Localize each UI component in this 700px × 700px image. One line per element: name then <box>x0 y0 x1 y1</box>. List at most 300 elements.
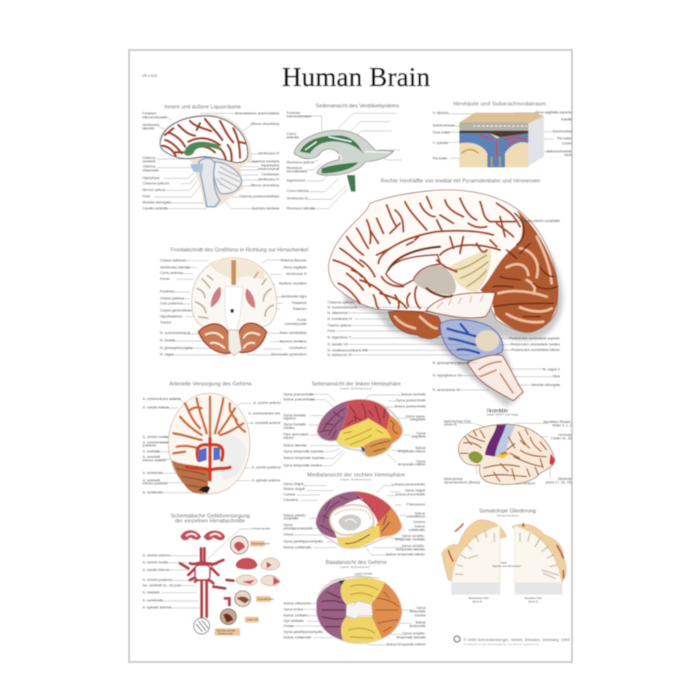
panel: ventricular system: Cornu <box>287 132 296 136</box>
panel: right hemisphere medial view: N. hypoglossus XII <box>433 374 462 378</box>
left labels: Foramen <box>287 111 301 115</box>
panel: frontal section: Fornix <box>297 318 307 322</box>
panel: meninges and subarachnoid space: raum <box>564 153 572 157</box>
right labels: Sinus sagittalis superior <box>535 110 573 114</box>
panel: schematic vessel supply: Lobus VIII <box>247 618 259 622</box>
cerebrum sulci <box>333 197 520 308</box>
yellow auditory <box>495 452 510 458</box>
red lobe <box>355 492 392 523</box>
brain section: halo <box>158 114 252 208</box>
central label: Lippe <box>500 560 507 564</box>
panel: meninges and subarachnoid space: Arachnoidea <box>552 130 572 134</box>
orange sulci <box>375 592 398 632</box>
panel: inner and outer CSF spaces: Pons <box>142 195 151 199</box>
panel: right hemisphere medial view small: temporalis lateralis <box>396 547 425 551</box>
cerebellum folia <box>217 167 240 190</box>
panel: frontal section: Thalamus <box>291 301 307 305</box>
label box <box>245 617 258 623</box>
cerebrum <box>160 116 248 163</box>
panel: right hemisphere medial view: N. trochlearis IV <box>327 317 353 321</box>
panel: arterial supply: A. spinalis anterior <box>252 478 281 482</box>
heading: Seitenansicht des Ventrikelsystems <box>316 103 399 109</box>
panel: left hemisphere lateral view: Gyrus postcentralis <box>396 399 426 403</box>
panel: cortical areas: Sehrinde <box>558 477 572 481</box>
panel: schematic vessel supply: Aa. cerebelli (S., sf) post. <box>143 583 182 587</box>
left labels: Corpus callosum <box>160 258 186 262</box>
panel: arterial supply: A. vertebralis <box>143 491 163 495</box>
panel: meninges and subarachnoid space: Cortex <box>562 141 572 145</box>
panel: left hemisphere lateral view: Sulcus temporalis superior <box>283 456 325 460</box>
left labels: Foramen <box>142 112 156 116</box>
right labels: A. cerebri anterior <box>253 401 282 405</box>
panel: inner and outer CSF spaces: Cisterna <box>142 165 155 169</box>
green visual association <box>468 451 483 463</box>
panel: schematic vessel supply: der einzelnen Hirnabschnitte <box>175 519 245 525</box>
panel: ventricular system: anterius <box>287 136 299 140</box>
yellow lobe <box>337 418 392 448</box>
CSF cisterns <box>190 163 203 172</box>
panel: left hemisphere lateral view: Gyrus frontalis <box>283 423 306 427</box>
heading: Somatotope Gliederung <box>479 508 536 514</box>
panel: right hemisphere medial view: N. olfactorius I <box>327 311 350 315</box>
copyright: © 2004 Schreckenberger, GmbH, Dresden, Germany, 1993 <box>464 638 570 642</box>
front face <box>459 122 528 167</box>
white highlights <box>305 137 390 160</box>
panel: right hemisphere medial view small: subcallosus <box>407 515 425 519</box>
panel: left hemisphere lateral view: medius <box>283 426 295 430</box>
occipital sulci <box>493 213 557 317</box>
panel: inner and outer CSF spaces: lateralis <box>142 127 155 131</box>
heading: Schematische Gefäßversorgung <box>171 513 250 519</box>
purple sulci <box>322 592 345 627</box>
leader lines <box>290 575 413 645</box>
label box <box>215 628 240 636</box>
leader lines <box>448 113 553 158</box>
circle: chorioidea <box>230 536 248 554</box>
side face <box>526 115 544 167</box>
brain outline <box>316 492 402 548</box>
right labels: Sulcus parieto-occipitalis <box>522 219 560 223</box>
cerebrum section <box>192 258 277 335</box>
panel: arterial supply: A. cerebelli <box>143 455 160 459</box>
panel: meninges and subarachnoid space: Pia mater <box>557 136 573 140</box>
panel: left hemisphere lateral view: Sulcus lateralis <box>283 443 307 447</box>
left labels: Chiasma opticum <box>327 301 354 305</box>
central red arteries <box>187 438 230 480</box>
heading: Medialansicht der rechten Hemisphäre <box>307 473 405 479</box>
panel: right hemisphere medial view: Medulla oblongata <box>532 383 560 387</box>
panel: basal view: temporalis <box>410 624 426 628</box>
panel: right hemisphere medial view small: Sulcus cinguli <box>283 487 305 491</box>
panel: right hemisphere medial view small: Praecuneus <box>406 503 425 507</box>
panel: frontal section: Tractus <box>160 320 172 324</box>
panel: left hemisphere lateral view: Pars opercularis <box>283 433 309 437</box>
lateral brains row 2 <box>236 575 257 585</box>
panel: basal view: Gyrus rectus <box>283 607 303 611</box>
blue arbor streaks <box>447 323 480 353</box>
panel: schematic vessel supply: Pons/Medulla <box>258 597 274 601</box>
panel: schematic vessel supply: Stammganglien <box>251 542 270 546</box>
purple lobes <box>317 580 347 640</box>
panel: schematic vessel supply: Rückenmark <box>218 632 234 636</box>
right area label: Sensibles Feld <box>524 596 542 600</box>
leader lines <box>154 113 260 209</box>
panel: inner and outer CSF spaces: Nervus opticus <box>142 188 166 192</box>
panel: right hemisphere medial view small: Sulcus parieto- <box>283 513 307 517</box>
purple lobe <box>316 492 362 538</box>
panel: ventricular system: Recessus <box>287 166 302 170</box>
cerebellum folds <box>177 468 206 487</box>
panel: cortical areas: Wernicke-Zentrum <box>507 481 535 485</box>
panel: cortical areas: Felder 41, 42 <box>551 436 572 440</box>
panel: arterial supply: inferior posterior <box>143 482 169 486</box>
heading: Hirnhäute und Subarachnoidalraum <box>453 102 547 108</box>
panel: left hemisphere lateral view: temporalis inferior <box>398 463 426 467</box>
occipital gyri <box>498 237 552 322</box>
panel: arterial supply: A. cerebelli anterior <box>251 421 282 425</box>
insula cream <box>448 248 491 292</box>
blue cisterns <box>198 447 220 463</box>
panel: ventricular system <box>287 103 402 210</box>
panel: frontal section: Sinus sagittalis <box>283 265 307 269</box>
panel: inner and outer CSF spaces: Aqueductus <box>261 163 280 167</box>
leader lines <box>170 260 285 355</box>
brainstem section <box>228 330 242 356</box>
heading: Frontalschnitt des Großhirns in Richtung zur Hirnschenkel <box>171 247 308 253</box>
panel: inner and outer CSF spaces: cerebelli <box>142 160 156 164</box>
panel: inner and outer CSF spaces: Cisterna <box>142 156 155 160</box>
heading: Rindenfelder <box>487 408 509 414</box>
panel: basal view: Gyri orbitales <box>283 619 304 623</box>
panel: frontal section: N. vagus <box>160 353 174 357</box>
copyright logo <box>454 636 460 642</box>
panel: basal view: Sulcus <box>415 621 426 625</box>
heading: Rechte Hirnhälfte von medial mit Pyramidenbahn und Hirnnerven <box>381 179 540 185</box>
panel: right hemisphere medial view <box>327 179 563 407</box>
panel: left hemisphere lateral view <box>283 382 426 467</box>
title: Human Brain <box>282 62 430 92</box>
panel: right hemisphere medial view small: Calcarina <box>283 498 298 502</box>
panel: frontal section: Decussatio pyramidum <box>271 353 307 357</box>
left area label: Motorisches Feld <box>468 596 489 600</box>
dark accent <box>338 579 347 586</box>
panel: arterial supply: A. cerebri posterior <box>252 466 282 470</box>
left labels: Gyrus cinguli <box>283 482 304 486</box>
cortical band tan <box>335 509 371 520</box>
right ticks <box>520 533 558 578</box>
top skin layer <box>459 113 544 123</box>
heading: Arterielle Versorgung des Gehirns <box>169 381 252 387</box>
panel: basal view: Gyrus parahippocampalis <box>283 630 323 634</box>
panel: frontal section: Cornu anterius <box>160 271 183 275</box>
panel: right hemisphere medial view small: Gyrus occipito- <box>402 534 425 538</box>
left cortex tan <box>442 520 507 582</box>
panel: inner and outer CSF spaces: interventriculare <box>142 115 167 119</box>
panel: right hemisphere medial view small: Sulcus collateralis <box>283 545 311 549</box>
grey thalamus <box>338 515 361 531</box>
panel: frontal section: Cerebellum <box>289 346 307 350</box>
panel: cortical areas: Hörrinde <box>558 433 572 437</box>
occipital cut region <box>480 210 558 332</box>
orange and tan sulci <box>370 420 398 452</box>
red visual tip <box>549 453 555 466</box>
bone layer <box>459 122 528 131</box>
panel: right hemisphere medial view: N. abducens VI <box>327 353 351 357</box>
cerebellum lobes left <box>198 324 231 354</box>
panel: right hemisphere medial view: N. accessorius XI <box>433 388 460 392</box>
left labels: Sulcus olfactorius <box>283 602 311 606</box>
panel: meninges and subarachnoid space: Pia mater <box>433 156 448 160</box>
panel: frontal section: Crus posterius <box>160 302 183 306</box>
panel: somatotopic organisation: (Area 3) <box>528 599 538 603</box>
brainstem folds <box>478 362 513 393</box>
left red accents <box>448 523 463 562</box>
right labels: Gyrus <box>416 606 426 610</box>
midbrain white band <box>426 293 495 318</box>
panel: ventricular system: Cornu inferius <box>287 189 309 193</box>
panel: right hemisphere medial view small: Gyrus parahippocampalis <box>283 540 323 544</box>
tan lobe <box>363 438 392 457</box>
right labels: Lobulus paracentralis <box>392 483 425 487</box>
panel: arterial supply: A. cerebri media <box>143 435 168 439</box>
circle: spinal cord <box>194 618 210 634</box>
blue arachnoid layer <box>459 133 528 167</box>
panel: frontal section: Corpus geniculatum <box>160 309 191 313</box>
panel: right hemisphere medial view small: Gyrus cinguli <box>405 489 425 493</box>
panel: left hemisphere lateral view: Sulcus <box>415 446 426 450</box>
panel: ventricular system: Ventriculus III <box>287 197 308 201</box>
panel: right hemisphere medial view: N. oculomotorius III <box>327 306 357 310</box>
sulci <box>460 428 547 482</box>
central tan strip <box>231 260 236 285</box>
panel: right hemisphere medial view: N. vestibulocochlearis VIII <box>327 348 367 352</box>
panel: schematic vessel supply: A. spinalis anterior <box>143 606 172 610</box>
red pia vessels <box>480 135 527 157</box>
panel: meninges and subarachnoid space: Dura mater <box>433 130 451 134</box>
panel: ventricular system: interventriculare <box>287 115 312 119</box>
panel: right hemisphere medial view small: parahippocampalis <box>283 526 313 530</box>
panel: schematic vessel supply: A. cerebri media <box>143 560 168 564</box>
leader lines <box>295 113 402 209</box>
yellow lobe <box>337 526 380 548</box>
cingulate darker band <box>388 247 452 297</box>
panel: frontal section: Substantia nigra <box>281 295 307 299</box>
panel: frontal section: Globus pallidus <box>160 296 184 300</box>
panel: arterial supply <box>143 381 282 495</box>
red ventricular lobes <box>211 287 255 308</box>
right labels: Cisterna fissurae <box>281 258 307 262</box>
panel: basal view: temporalis lateralis <box>397 635 426 639</box>
panel: arterial supply: A. carotis interna <box>143 406 169 410</box>
panel: inner and outer CSF spaces: Ventriculus III <box>258 152 279 156</box>
ventricle body <box>294 130 394 175</box>
panel: frontal section: Hypothalamus <box>160 314 183 318</box>
panel: arterial supply: A. cerebelli <box>143 478 160 482</box>
orange lobes <box>372 582 402 638</box>
panel: right hemisphere medial view: N. vagus X <box>543 367 561 371</box>
panel: inner and outer CSF spaces: Plexus choroideus <box>251 122 280 126</box>
lateral ventricle opening <box>386 255 441 285</box>
panel: inner and outer CSF spaces: Cisterna pontocerebellaris <box>239 195 280 199</box>
cerebrum sulci <box>162 119 245 161</box>
left ticks <box>456 531 494 574</box>
panel: basal view: Sulcus collateralis <box>283 635 311 639</box>
panel: cortical areas: Motorisches <box>444 477 463 481</box>
panel: left hemisphere lateral view: Gyrus frontalis <box>283 413 306 417</box>
apex tick <box>522 522 525 527</box>
panel: arterial supply: A. basilaris <box>143 449 160 453</box>
left labels: Motorisches Feld <box>444 419 471 423</box>
panel: schematic vessel supply <box>143 513 280 636</box>
sub heading: (Homunculus) <box>497 514 518 518</box>
panel: inner and outer CSF spaces: Chiasma opticum <box>142 182 169 186</box>
panel: frontal section: Nucleus dentatus <box>280 339 307 343</box>
panel: inner and outer CSF spaces: Apertura mediana <box>252 206 279 210</box>
panel: left hemisphere lateral view: marginalis <box>410 418 426 422</box>
panel: meninges and subarachnoid space: Kalotte <box>561 118 572 122</box>
leader lines <box>337 221 552 390</box>
panel: basal view: Sulcus orbitales <box>283 614 308 618</box>
panel: right hemisphere medial view small <box>283 473 426 557</box>
panel: right hemisphere medial view small: Sulcus temporalis inferior <box>386 553 426 557</box>
top label: Lobus frontalis <box>355 571 373 575</box>
panel: arterial supply: posterior <box>143 444 157 448</box>
insula folds <box>453 255 488 287</box>
panel: inner and outer CSF spaces: Hypophyse <box>142 176 160 180</box>
panel: cortical areas: (Area 4) <box>444 423 457 427</box>
panel: inner and outer CSF spaces: Medulla oblongata <box>142 201 171 205</box>
panel: cortical areas: (Area 17, 18, 19) <box>546 480 572 484</box>
panel: cortical areas: felder 3, 1, 2 <box>552 424 572 428</box>
right labels: Granulationes arachnoidales <box>235 111 280 115</box>
cerebellar blue body <box>440 320 503 360</box>
sub heading: (nach VOGT und Vogt) <box>487 413 518 417</box>
purple motor band <box>485 425 506 457</box>
panel: frontal section: commissuralis <box>285 322 307 326</box>
panel: right hemisphere medial view small: Gyrus occipito- <box>402 544 425 548</box>
brain outline <box>317 577 402 643</box>
corpus callosum <box>413 266 456 295</box>
orange lobe <box>376 508 402 538</box>
panel: right hemisphere medial view small: Gyrus <box>283 523 293 527</box>
brain shadow <box>335 196 563 407</box>
brain base <box>168 393 250 494</box>
artery tree <box>180 548 233 617</box>
panel: basal view: Sulcus temporalis inferior <box>387 643 426 647</box>
outer cream cortex <box>208 259 265 280</box>
right hemisphere section <box>514 526 562 594</box>
panel: basal view <box>283 560 426 647</box>
white lower-right lobe <box>219 435 247 480</box>
side gyri <box>195 272 274 318</box>
panel: frontal section: Pons cerebellaris <box>280 331 307 335</box>
panel: somatotopic organisation: (Area 4) <box>472 599 482 603</box>
sulcus yellow <box>462 150 500 167</box>
cerebellum folds <box>205 333 260 348</box>
panel: left hemisphere lateral view: angularis <box>412 435 426 439</box>
central structures <box>225 287 243 330</box>
yellow sulci <box>348 585 378 638</box>
catalogue number: VR 0 615 <box>142 74 157 78</box>
panel: frontal section: Ventriculus III <box>286 272 307 276</box>
panel: frontal section <box>160 247 308 357</box>
sulci <box>320 497 390 544</box>
orange accent <box>499 451 507 455</box>
panel: right hemisphere medial view: Oliva <box>552 374 560 378</box>
dura dark layer <box>459 131 528 137</box>
panel: right hemisphere medial view small: occipitalis <box>283 517 299 521</box>
panel: right hemisphere medial view small: collateralis <box>409 528 425 532</box>
panel: right hemisphere medial view small: Cuneus <box>283 493 296 497</box>
leader lines <box>162 529 253 608</box>
frontal lower cut region <box>388 311 444 339</box>
panel: right hemisphere medial view: Pedunculus cerebellaris inferior <box>511 348 561 352</box>
panel: left hemisphere lateral view: Gyrus temporalis superior <box>283 450 324 454</box>
green ventricle fill <box>300 135 363 192</box>
circle: midbrain <box>235 591 251 607</box>
panel: right hemisphere medial view: Tractus opticus <box>327 324 351 328</box>
grey bottom <box>452 582 562 594</box>
heading: Basalansicht des Gehirns <box>326 560 387 566</box>
yellow sulci <box>343 428 383 445</box>
purple and red sulci <box>320 403 385 438</box>
left hemisphere section <box>452 526 500 594</box>
panel: inner and outer CSF spaces: chiasmatis <box>142 168 159 172</box>
left labels: A. communicans anterior <box>143 397 182 401</box>
brainstem <box>199 158 220 207</box>
sub heading: (nach Hoffmeister) <box>340 387 372 391</box>
panel: right hemisphere medial view small: Cuneus <box>413 520 425 524</box>
panel: right hemisphere medial view small: Sulcus precentralis <box>396 493 425 497</box>
tan peduncle <box>475 330 499 351</box>
frontal lower gyri <box>395 317 437 328</box>
panel: schematic vessel supply: Medulla spinalis <box>217 629 236 633</box>
panel: schematic vessel supply: A. cerebri posterior <box>143 578 173 582</box>
panel: basal view: Uncus <box>283 624 293 628</box>
panel: somatotopic organisation <box>442 508 570 646</box>
panel: ventricular system: Recessus opticus <box>287 160 314 164</box>
panel: ventricular system: infundibularis <box>287 170 307 174</box>
panel: inner and outer CSF spaces: Ventriculus <box>142 123 160 127</box>
panel: left hemisphere lateral view: Sulcus praecentralis <box>283 398 315 402</box>
leader lines <box>308 394 410 466</box>
ventricle in green <box>184 142 222 156</box>
panel: ventricular system: Recessus lateralis <box>287 206 315 210</box>
panel: basal view: medius <box>414 613 426 617</box>
panel: inner and outer CSF spaces: mesencephali <box>258 167 280 171</box>
panel: right hemisphere medial view small: Uncus <box>283 533 293 537</box>
left labels: V. diploica <box>433 111 448 115</box>
poster sheet with grey border <box>129 50 572 662</box>
brain outline <box>317 400 402 457</box>
panel: inner and outer CSF spaces: Apertura mediana <box>252 160 279 164</box>
panel: frontal section: N. facialis <box>160 339 175 343</box>
panel: arterial supply: A. communicans <box>143 440 169 444</box>
leader lines <box>458 423 550 483</box>
midbrain striations <box>437 295 483 308</box>
panel: frontal section: Nucleus caudatus <box>279 282 307 286</box>
panel: right hemisphere medial view: N. facialis VII <box>327 343 348 347</box>
brain outline <box>458 424 555 485</box>
panel: left hemisphere lateral view: inferior <box>283 436 295 440</box>
panel: left hemisphere lateral view: superior <box>283 417 297 421</box>
inner highlights <box>345 519 356 523</box>
central white base <box>346 601 373 619</box>
right labels: Sensibles Rinden- <box>543 420 572 424</box>
lateral brains row 1 <box>236 558 257 569</box>
heading: Seitenansicht der linken Hemisphäre <box>312 382 401 388</box>
panel: meninges and subarachnoid space <box>433 102 573 167</box>
